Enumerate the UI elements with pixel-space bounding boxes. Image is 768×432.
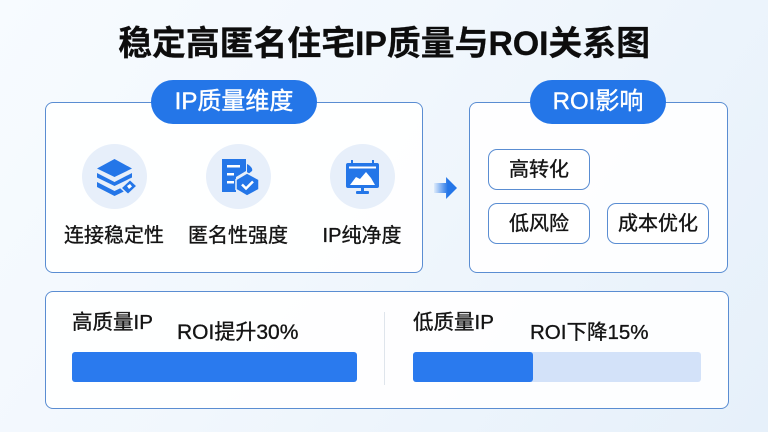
icon: stacked layers: [82, 144, 147, 209]
label: high quality IP: 高质量IP: [72, 311, 153, 334]
arrow: [434, 177, 457, 199]
label: low quality IP: 低质量IP: [413, 311, 494, 334]
heading: ROI impact: ROI影响: [553, 88, 643, 115]
bar fill: [413, 352, 533, 382]
panel: IP quality dimensions: [45, 102, 423, 273]
heading: IP quality dimensions: [151, 80, 317, 124]
icon: monitor with mountains: [330, 144, 395, 209]
heading: ROI impact: [530, 80, 666, 124]
label: IP purity: IP纯净度: [323, 225, 401, 247]
title: 稳定高匿名住宅IP质量与ROI关系图: [118, 25, 650, 63]
value: ROI down 15%: ROI下降15%: [530, 321, 648, 344]
value: ROI up 30%: ROI提升30%: [177, 321, 298, 344]
tag: low risk: 低风险: [509, 213, 569, 235]
tag: high conversion: [488, 149, 590, 190]
divider: [384, 312, 385, 385]
label: connection stability: 连接稳定性: [64, 225, 164, 247]
panel: comparison: [45, 291, 729, 409]
icon: document with shield: [206, 144, 271, 209]
heading: IP quality dimensions: IP质量维度: [175, 88, 293, 115]
tag: low risk: [488, 203, 590, 244]
tag: cost optimization: [607, 203, 709, 244]
tag: cost optimization: 成本优化: [618, 213, 698, 235]
label: anonymity strength: 匿名性强度: [188, 225, 288, 247]
tag: high conversion: 高转化: [509, 159, 569, 181]
bar: high quality IP: [72, 352, 357, 382]
bar: low quality IP: [413, 352, 701, 382]
panel: ROI impact: [468, 102, 728, 273]
